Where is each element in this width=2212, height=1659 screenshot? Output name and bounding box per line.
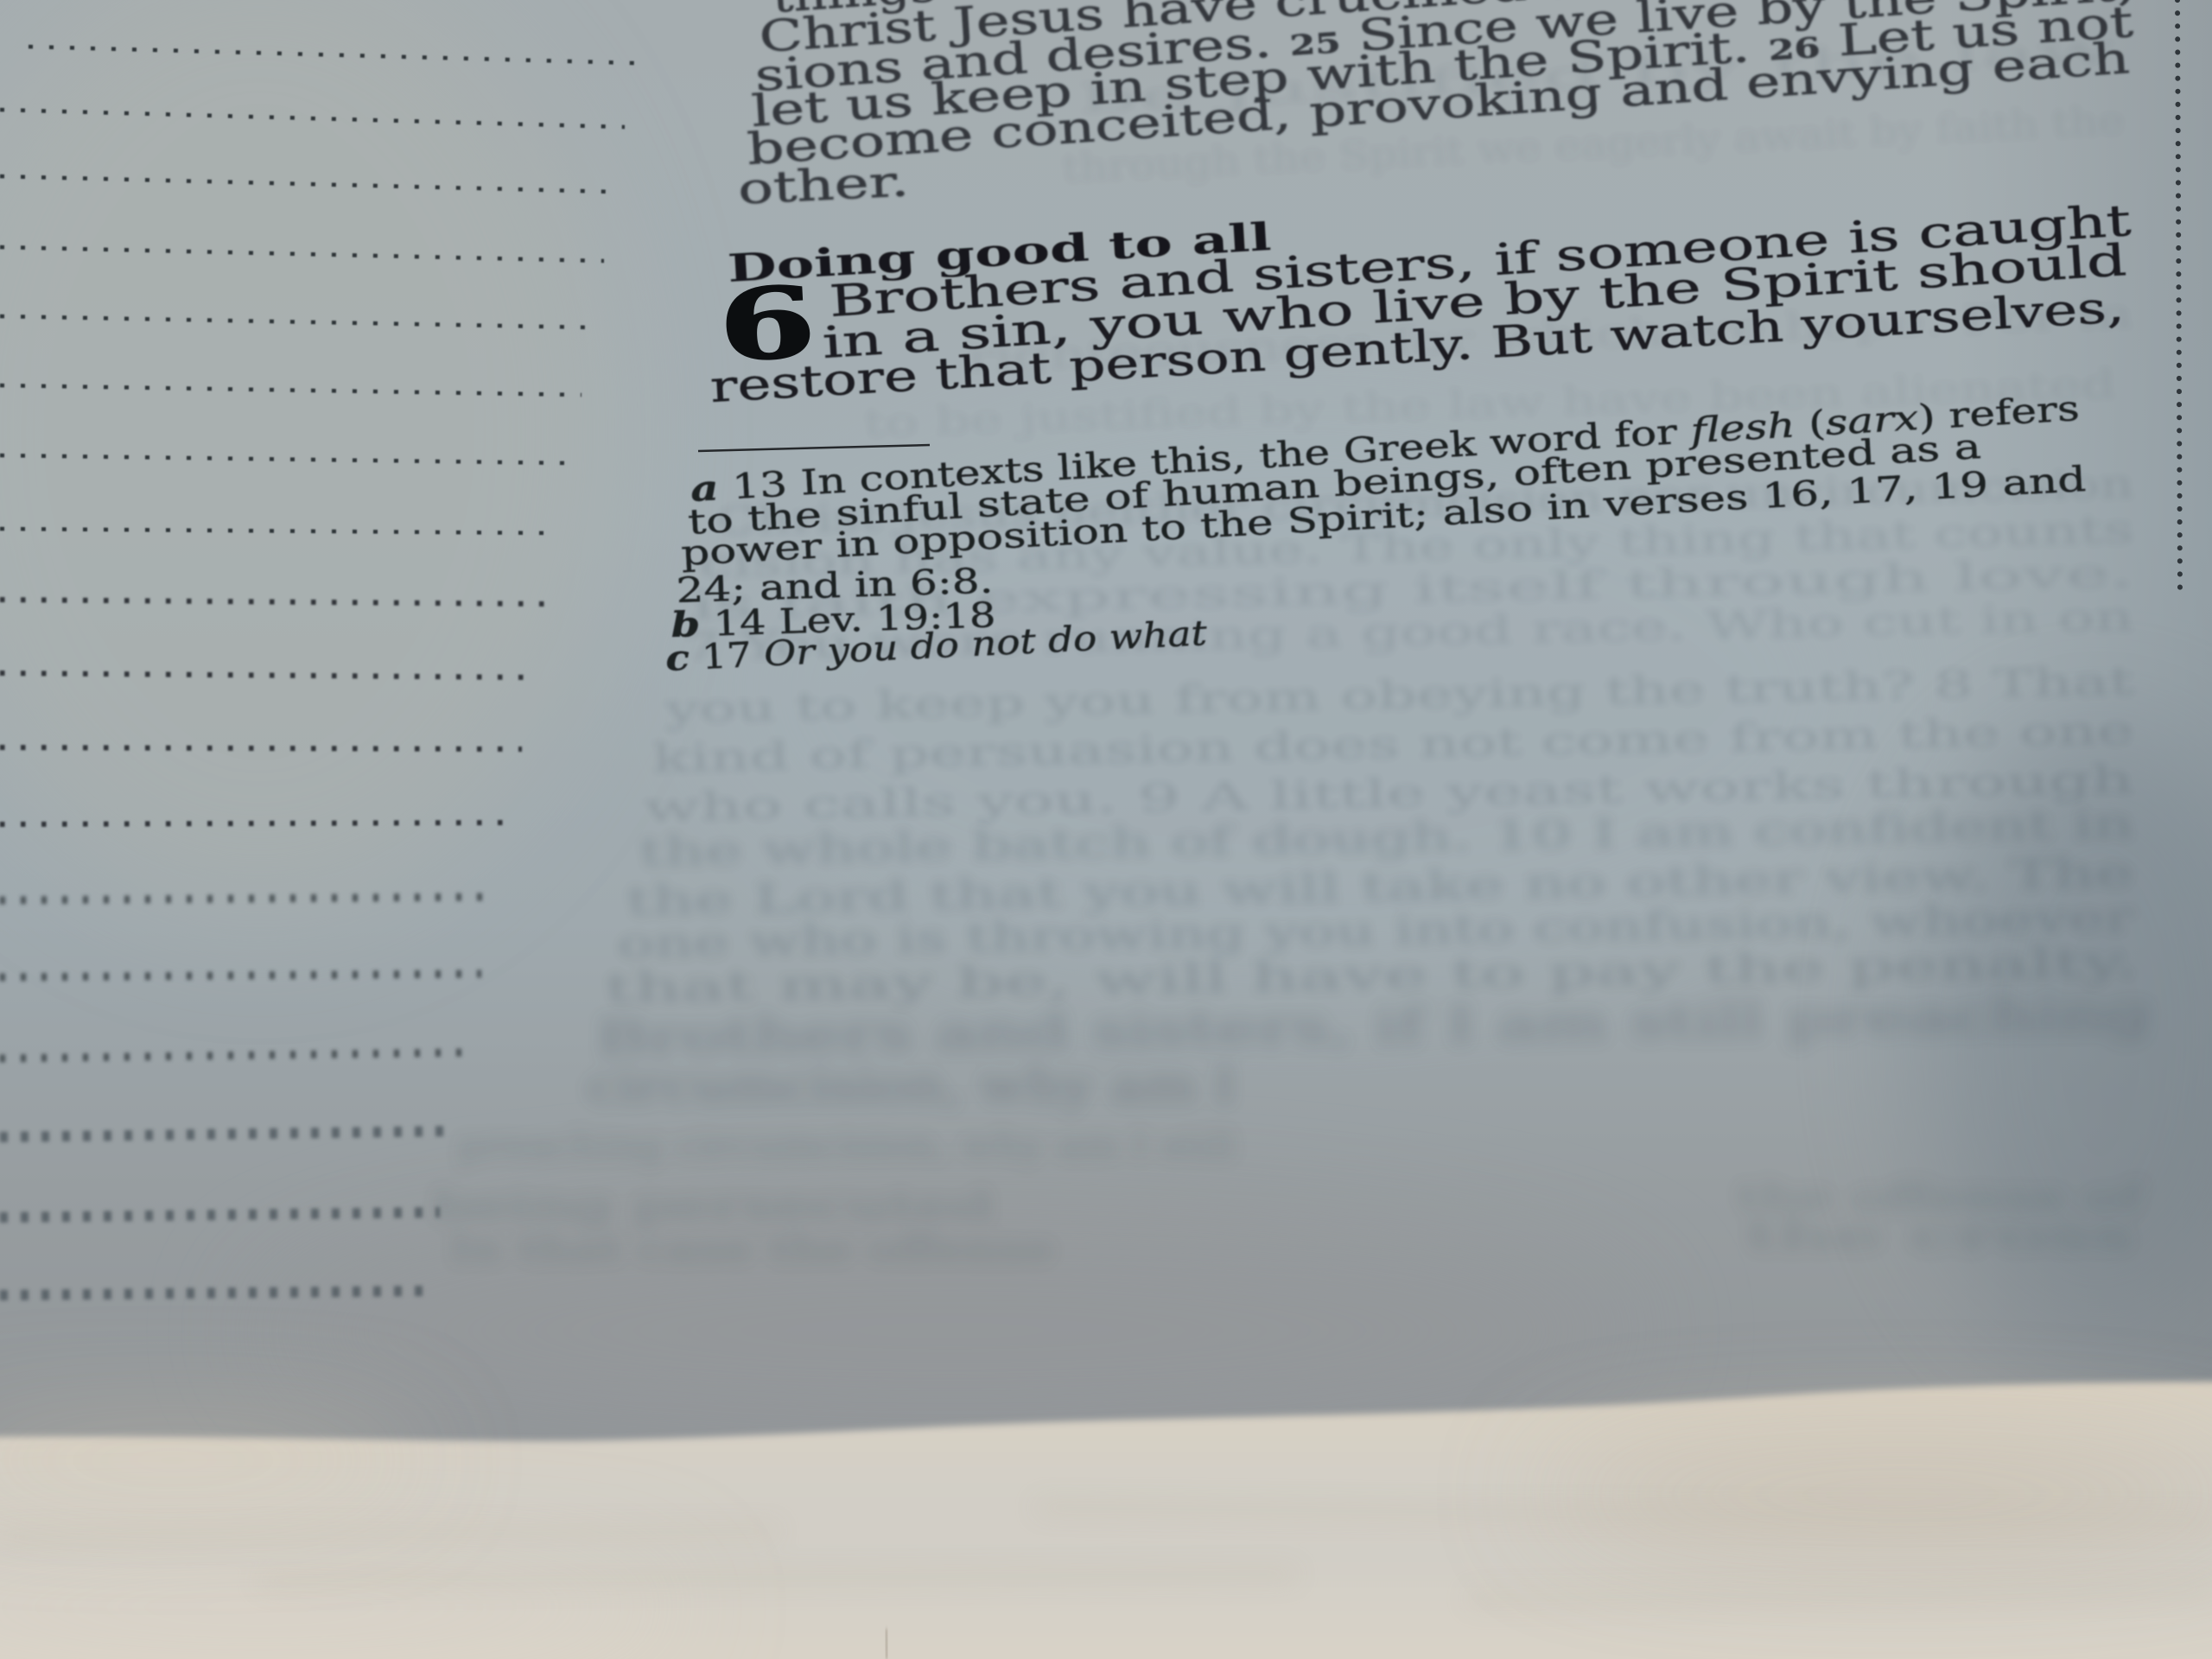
footnotes: a 13 In contexts like this, the Greek word for flesh (sarx ) refers [690,388,2081,510]
bleed-through blurred text from page beneath: one who is throwing you into confusion, whoever [617,893,2134,967]
footnotes [664,388,2087,679]
main body text: end of chapter 5 [737,0,2140,214]
bleed-through blurred text from page beneath: being persecuted [432,1185,994,1227]
chapter 6 body text [709,195,2133,412]
bleed-through blurred text from page beneath: circumcision, why am I [588,1058,1236,1113]
chapter 6 body text: Brothers and sisters, if someone is caught [828,195,2133,327]
bleed-through blurred text from page beneath: Brothers and sisters, if I am still preaching [595,987,2152,1065]
chapter 6 body text: in a sin, you who live by the Spirit should [821,235,2128,368]
bleed-through blurred text from page beneath: 7 You were running a good race. Who cut in on [682,595,2134,670]
footnote rule [698,445,930,451]
bleed-through blurred text from page beneath: to be justified by the law have been alienated [863,362,2117,446]
bleed-through blurred text from page beneath: through the Spirit we eagerly await by faith the [1061,99,2125,191]
bleed-through blurred text from page beneath: the offense of [1737,1176,2148,1218]
bleed-through blurred text from page beneath: the whole batch of dough. 10 I am confident in [639,800,2134,875]
bleed-through blurred text from page beneath [432,27,2152,1270]
bleed-through blurred text from page beneath: the Lord that you will take no other view. The [626,849,2134,925]
wooden table surface [0,1382,2212,1659]
bleed-through blurred text from page beneath: righteousness for which we hope. For in [966,292,2133,381]
footnotes: b 14 Lev. 19:18 [671,594,996,645]
main body text: end of chapter 5: let us keep in step with the Spirit. 26 Let us not [750,0,2134,137]
footnotes: power in opposition to the Spirit; also in verses 16, 17, 19 and [680,460,2087,574]
bleed-through blurred text from page beneath: In that case the offense [449,1228,1054,1270]
bleed-through blurred text from page beneath: preaching circumcision, why am I still [458,1124,1236,1166]
main body text: end of chapter 5: become conceited, provoking and envying each [746,33,2131,175]
dotted vertical rule at right [2177,0,2180,594]
bleed-through blurred text from page beneath: cision has any value. The only thing that counts [699,507,2134,587]
bleed-through blurred text from page beneath: that may be, will have to pay the penalty. [604,938,2139,1012]
footnotes: 24; and in 6:8. [676,561,994,611]
bleed-through blurred text from page beneath: be justified by the law [1078,27,2117,122]
section heading: Doing good to all [727,215,1273,291]
bleed-through blurred text from page beneath: you to keep you from obeying the truth? 8 That [664,659,2134,732]
bleed-through blurred text from page beneath: who calls you. 9 A little yeast works through [643,758,2134,830]
footnotes: to the sinful state of human beings, often presented as a [687,427,1982,543]
footnotes: c 17 Or you do not do what [664,613,1209,679]
bleed-through blurred text from page beneath: the cross [1745,1215,2134,1257]
chapter 6 body text: restore that person gently. But watch yourselves, [709,282,2126,412]
main body text: end of chapter 5: other. [737,156,910,214]
bleed-through blurred text from page beneath: kind of persuasion does not come from the one [652,709,2134,781]
dotted column rules at left [0,47,635,1295]
bleed-through blurred text from page beneath: Christ Jesus neither circumcision nor uncircumcision [716,462,2134,543]
chapter number 6: 6 [716,265,818,384]
bleed-through blurred text from page beneath: is faith expressing itself through love. [690,551,2134,628]
